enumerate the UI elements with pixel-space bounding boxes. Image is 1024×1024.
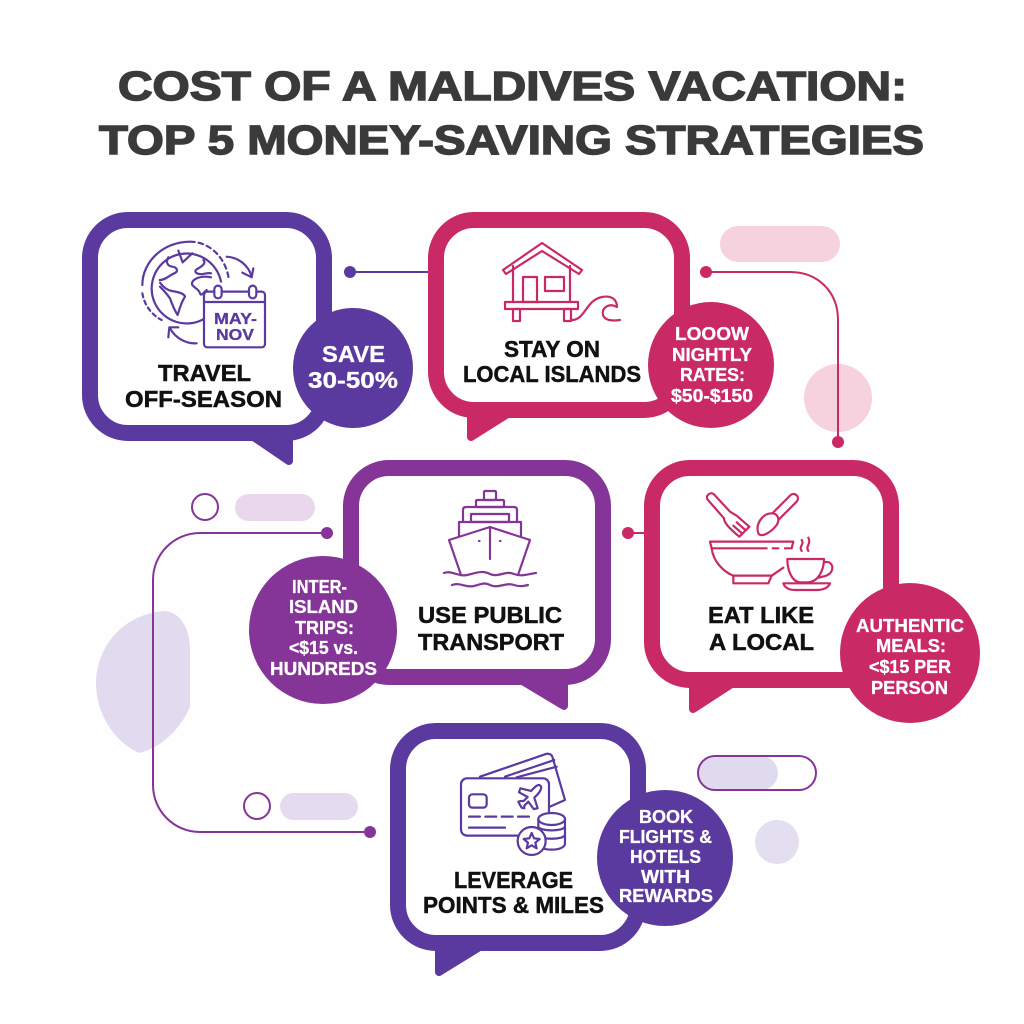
callout: authentic meals: MEALS: — [876, 635, 946, 656]
connector: step 4 to step 3 — [622, 527, 646, 539]
callout: book with rewards: HOTELS — [630, 846, 701, 867]
heading: use public transport — [418, 602, 564, 655]
heading: leverage points and miles — [423, 867, 604, 918]
heading: eat like a local: A LOCAL — [709, 629, 814, 655]
connector: step 1 to step 2 — [344, 266, 430, 278]
heading: travel off-season: TRAVEL — [158, 360, 251, 386]
heading: eat like a local — [708, 602, 814, 655]
callout: authentic meals — [840, 583, 980, 723]
panel: eat like a local — [652, 468, 980, 723]
callout: nightly rates: NIGHTLY — [672, 344, 753, 365]
heading: stay on local islands: LOCAL ISLANDS — [463, 361, 641, 387]
callout: nightly rates: LOOOW — [675, 323, 750, 344]
icon label: May-Nov: NOV — [216, 327, 255, 344]
icon label: May-Nov: MAY- — [214, 311, 257, 328]
icon: stilt house and wave — [503, 243, 620, 321]
panel: travel off-season — [90, 220, 413, 461]
callout: authentic meals: AUTHENTIC — [856, 615, 964, 636]
callout: authentic meals: <$15 PER — [869, 656, 951, 677]
callout: inter-island trips — [249, 556, 397, 704]
callout: save 30-50%: SAVE — [322, 341, 385, 367]
icon label: May-Nov — [214, 311, 257, 344]
icon: bowl, cutlery and cup — [707, 493, 832, 590]
callout: inter-island trips: TRIPS: — [295, 617, 354, 638]
title: TOP 5 MONEY-SAVING STRATEGIES — [99, 117, 924, 163]
panel: use public transport — [249, 468, 603, 706]
panel: leverage points and miles — [398, 731, 733, 972]
callout: inter-island trips: ISLAND — [289, 596, 358, 617]
callout: nightly rates: $50-$150 — [671, 385, 753, 406]
title: COST OF A MALDIVES VACATION: — [118, 63, 907, 109]
callout: book with rewards: FLIGHTS & — [619, 826, 712, 847]
heading: stay on local islands — [463, 336, 641, 387]
heading: leverage points and miles: LEVERAGE — [454, 867, 573, 893]
callout: book with rewards: WITH — [641, 866, 690, 887]
panel: stay on local islands — [436, 220, 774, 437]
heading: use public transport: USE PUBLIC — [418, 602, 562, 628]
callout: authentic meals: PERSON — [871, 677, 948, 698]
heading: stay on local islands: STAY ON — [504, 336, 600, 362]
heading: eat like a local: EAT LIKE — [708, 602, 814, 628]
title — [99, 63, 924, 163]
decorative background shapes — [96, 226, 872, 864]
callout: book with rewards: REWARDS — [619, 885, 713, 906]
heading: use public transport: TRANSPORT — [418, 629, 564, 655]
heading: leverage points and miles: POINTS & MILES — [423, 892, 604, 918]
icon: ferry ship — [444, 491, 536, 586]
heading: travel off-season: OFF-SEASON — [125, 386, 282, 412]
callout: inter-island trips: INTER- — [292, 576, 347, 597]
callout: save 30-50%: 30-50% — [308, 367, 398, 393]
icon: cards, coins and star — [461, 754, 565, 855]
callout: inter-island trips: HUNDREDS — [270, 658, 377, 679]
callout: book with rewards — [597, 790, 733, 926]
callout: inter-island trips: <$15 vs. — [289, 637, 358, 658]
heading: travel off-season — [125, 360, 282, 412]
connector: step 3 to step 5 — [153, 527, 376, 838]
callout: save 30-50% — [293, 308, 413, 428]
connector: step 2 to step 4 — [700, 266, 844, 448]
icon: globe and calendar — [142, 242, 265, 347]
callout: nightly rates — [648, 302, 774, 428]
callout: nightly rates: RATES: — [680, 364, 745, 385]
callout: book with rewards: BOOK — [639, 806, 694, 827]
